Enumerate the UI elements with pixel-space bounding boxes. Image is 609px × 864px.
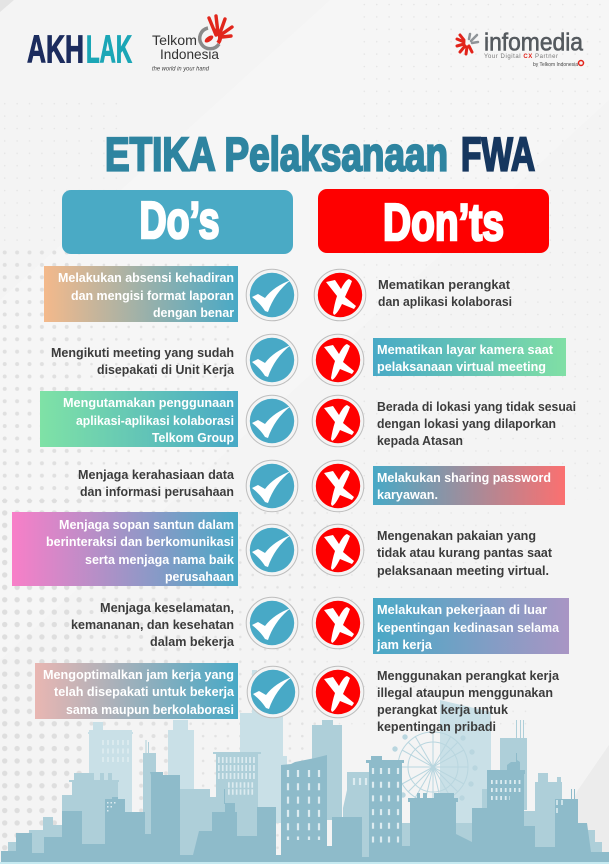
dont 5: pelaksanaan meeting virtual. — [377, 563, 549, 578]
dont 2 — [373, 338, 566, 376]
dont 7: Menggunakan perangkat kerja — [377, 668, 560, 683]
do 6: Menjaga keselamatan, — [100, 600, 234, 615]
mid windows — [218, 760, 366, 792]
dont 2: Mematikan layar kamera saat — [377, 342, 554, 357]
do 6 — [71, 600, 235, 649]
back windows — [103, 740, 128, 762]
dont 1: Mematikan perangkat — [378, 277, 511, 292]
do 5 — [12, 512, 238, 586]
header: Do's: Do’s — [140, 192, 220, 250]
dont 3: Berada di lokasi yang tidak sesuai — [377, 399, 576, 414]
do 1: Melakukan absensi kehadiran — [58, 270, 234, 285]
front windows — [288, 768, 562, 845]
do 3: Telkom Group — [152, 430, 234, 445]
dont 7: kepentingan pribadi — [377, 719, 496, 734]
dont 3 — [377, 399, 576, 448]
do 1: dengan benar — [153, 305, 234, 320]
header: Do's — [62, 190, 293, 254]
front buildings — [1, 753, 609, 863]
do 4: dan informasi perusahaan — [80, 484, 234, 499]
dont 1: dan aplikasi kolaborasi — [378, 294, 512, 309]
logo: AKHLAK: LAK — [86, 28, 132, 72]
dont 4: karyawan. — [377, 487, 438, 502]
do 5: berinteraksi dan berkomunikasi — [46, 534, 234, 549]
do 5: serta menjaga nama baik — [85, 552, 235, 567]
icon: infomedia burst — [457, 34, 478, 54]
dont 6: Melakukan pekerjaan di luar — [377, 602, 547, 617]
do 4: Menjaga kerahasiaan data — [78, 467, 235, 482]
icon: Telkom hand — [200, 16, 232, 49]
do 7: sama maupun berkolaborasi — [66, 702, 234, 717]
dont 5: tidak atau kurang pantas saat — [377, 545, 553, 560]
logo: infomedia: Your Digital CX Partner — [484, 54, 558, 60]
logo: infomedia — [457, 28, 584, 68]
header: Don'ts — [318, 189, 549, 253]
dont 6 — [373, 598, 569, 654]
do 4 — [78, 467, 235, 499]
do 1: dan mengisi format laporan — [71, 288, 234, 303]
city skyline — [0, 670, 609, 864]
icon: checks — [246, 269, 299, 718]
title: ETIKA Pelaksanaan — [105, 128, 448, 180]
dont 1 — [378, 277, 512, 309]
dont 6: kepentingan kedinasan selama — [377, 620, 560, 635]
mid buildings — [8, 720, 602, 860]
do 2: Mengikuti meeting yang sudah — [51, 345, 234, 360]
do 2: disepakati di Unit Kerja — [97, 362, 235, 377]
do 7: telah disepakati untuk bekerja — [54, 684, 235, 699]
dont 7: perangkat kerja untuk — [377, 702, 509, 717]
dont 3: dengan lokasi yang dilaporkan — [377, 416, 556, 431]
logo: AKHLAK: AKH — [27, 28, 84, 72]
logo: Telkom Indonesia — [152, 16, 232, 72]
do 1 — [44, 266, 238, 322]
dont 3: kepada Atasan — [377, 433, 463, 448]
dont 5: Mengenakan pakaian yang — [377, 528, 536, 543]
back buildings — [88, 670, 491, 823]
do 2 — [51, 345, 235, 377]
do 5: perusahaan — [165, 569, 234, 584]
dont 5 — [377, 528, 553, 578]
logo: infomedia: by Telkom Indonesia — [533, 62, 579, 68]
ferris wheel — [392, 732, 478, 823]
icon: crosses — [312, 269, 366, 718]
logo: Telkom Indonesia: Indonesia — [160, 46, 219, 62]
do 3 — [40, 391, 238, 447]
dont 7: illegal ataupun menggunakan — [377, 685, 553, 700]
logo: infomedia: infomedia — [484, 28, 583, 56]
do 7: Mengoptimalkan jam kerja yang — [43, 667, 234, 682]
dont 4: Melakukan sharing password — [377, 470, 551, 485]
do 3: aplikasi-aplikasi kolaborasi — [76, 413, 234, 428]
do 6: dalam bekerja — [150, 634, 235, 649]
logo: Telkom Indonesia: Telkom — [152, 32, 197, 48]
dont 6: jam kerja — [376, 637, 433, 652]
header: Don'ts: Don’ts — [383, 194, 504, 252]
do 6: kemananan, dan kesehatan — [71, 617, 234, 632]
dont 4 — [373, 466, 565, 505]
title: FWA — [461, 128, 535, 180]
do 3: Mengutamakan penggunaan — [63, 395, 234, 410]
logo: Telkom Indonesia: the world in your hand — [152, 66, 209, 72]
do 7 — [35, 663, 238, 719]
dont 2: pelaksanaan virtual meeting — [377, 359, 546, 374]
dont 7 — [377, 668, 560, 734]
do 5: Menjaga sopan santun dalam — [59, 517, 234, 532]
